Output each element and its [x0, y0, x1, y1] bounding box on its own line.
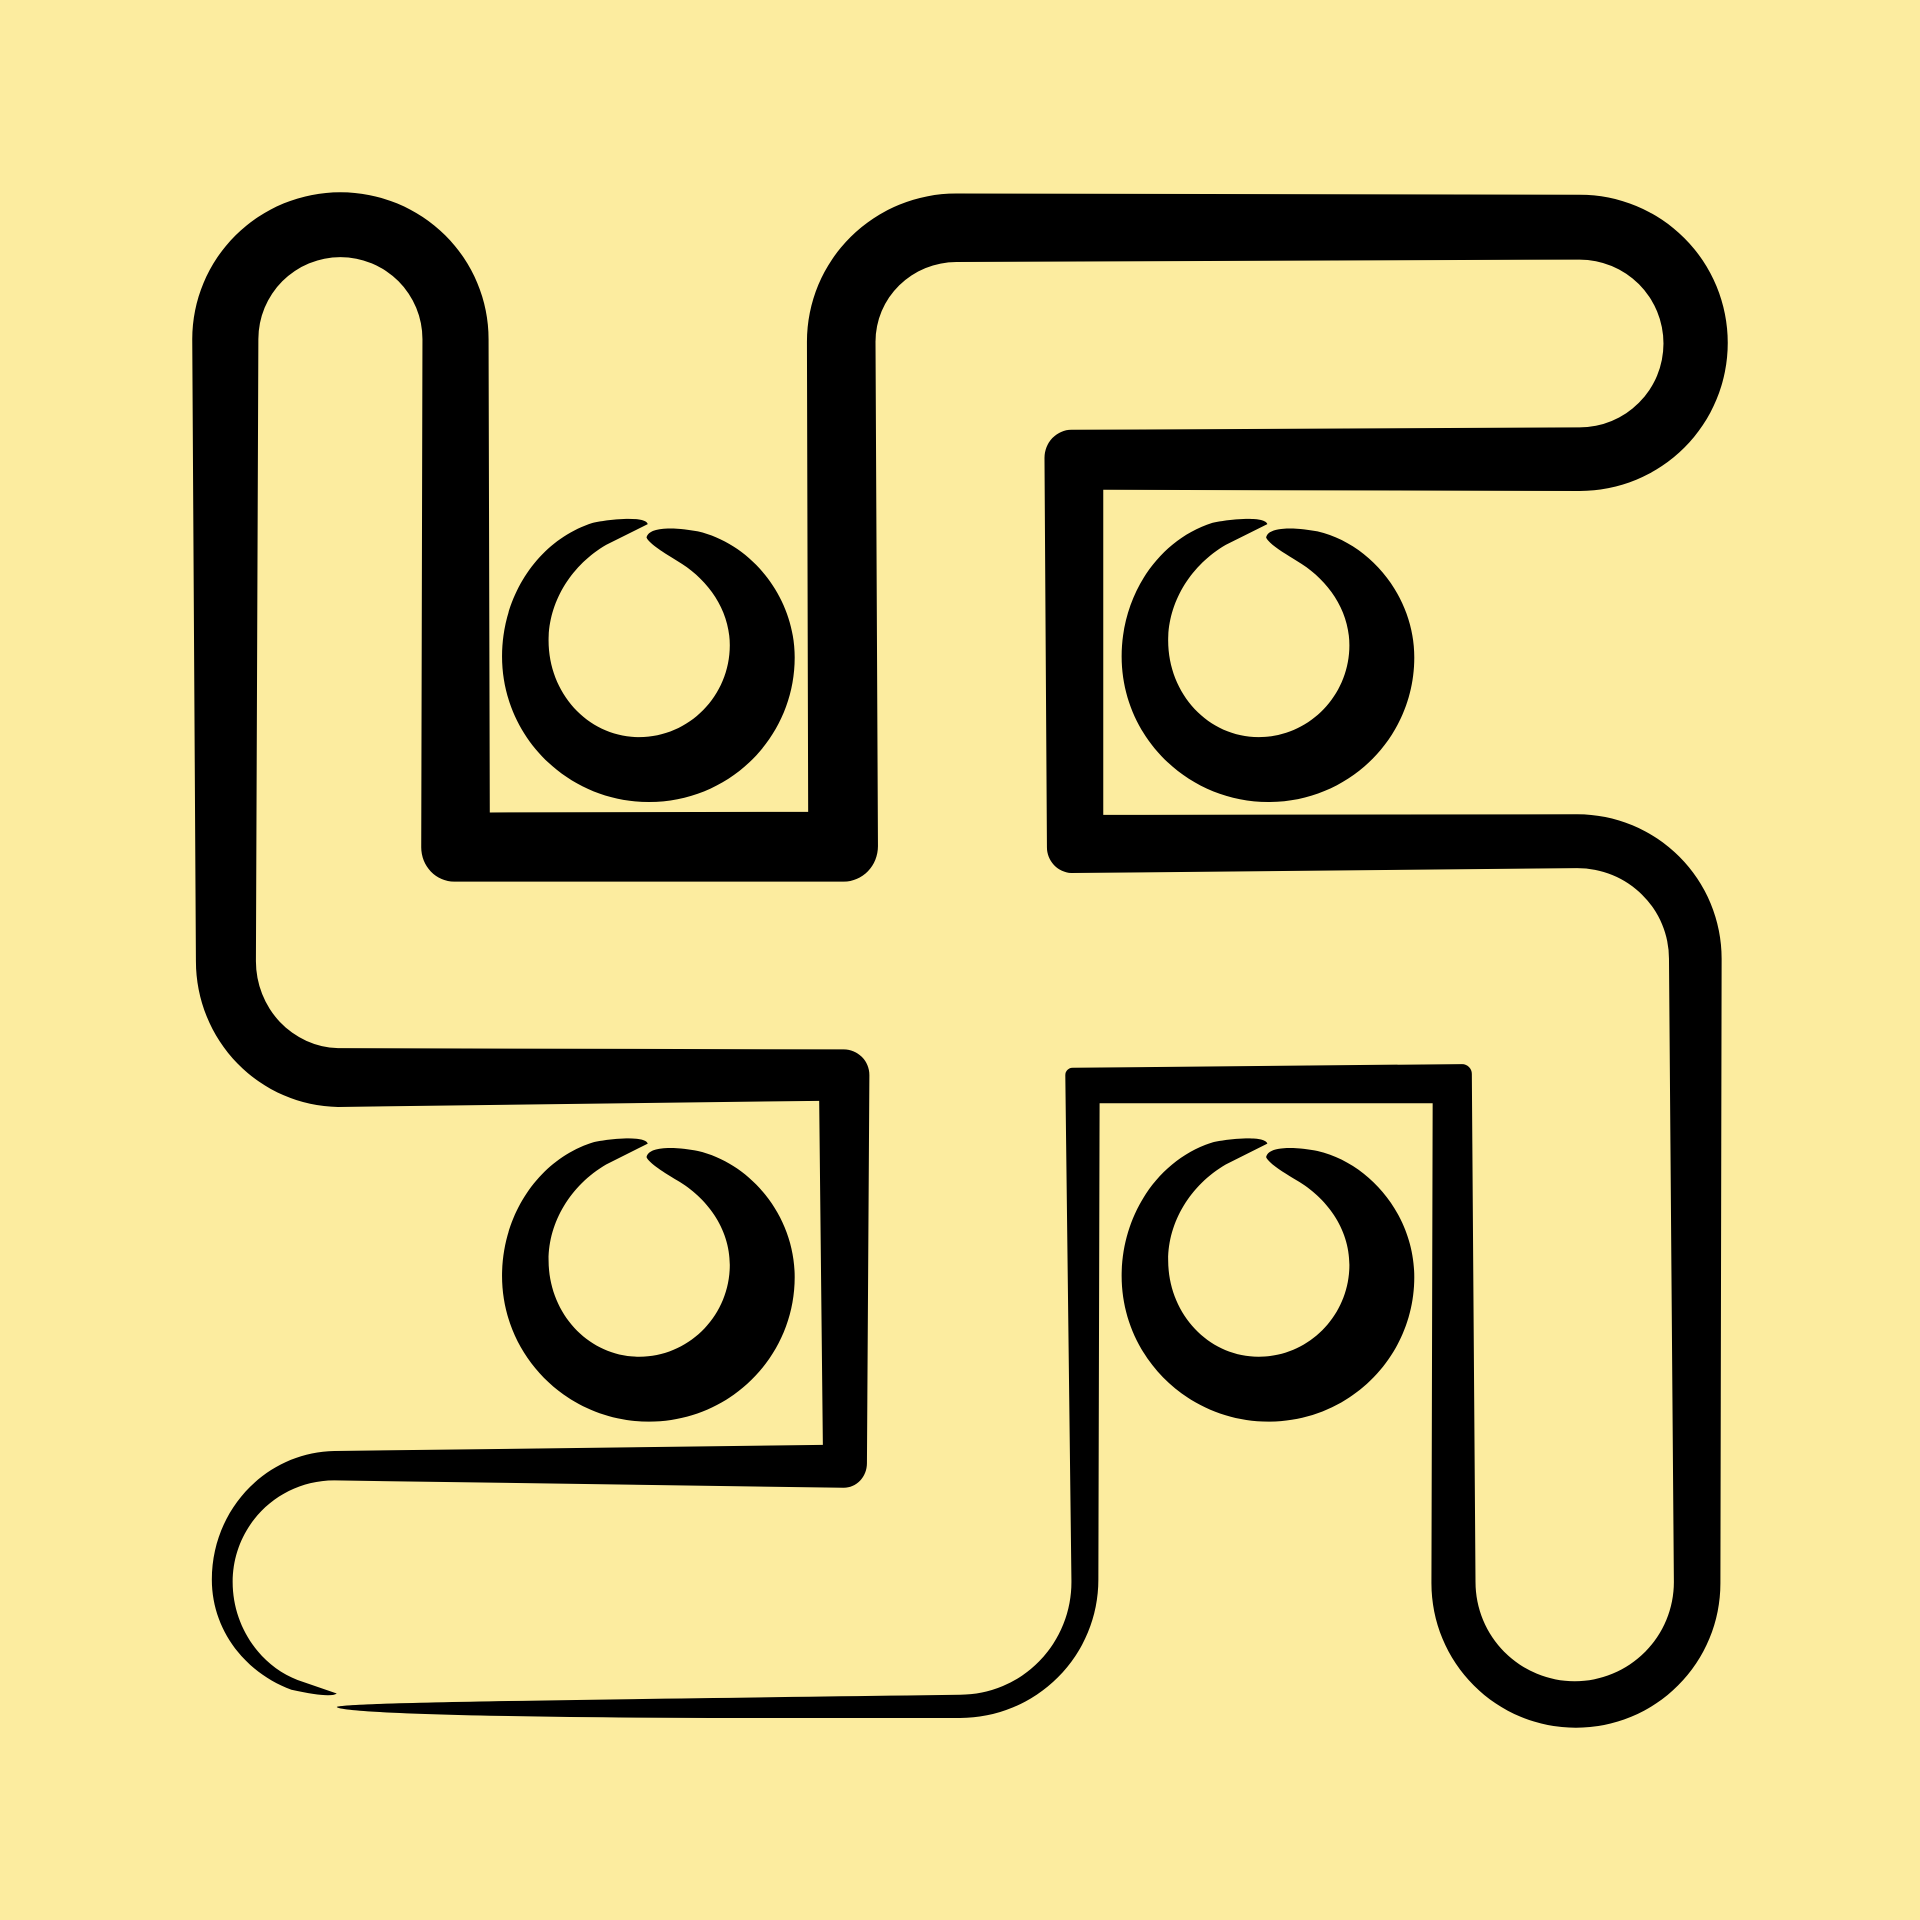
ribbon: brush-stroke outline — [192, 192, 1728, 1728]
ring: top left — [502, 519, 795, 802]
ring: bottom right — [1122, 1138, 1414, 1422]
ring: top right — [1122, 519, 1414, 802]
ring: bottom left — [502, 1138, 795, 1422]
